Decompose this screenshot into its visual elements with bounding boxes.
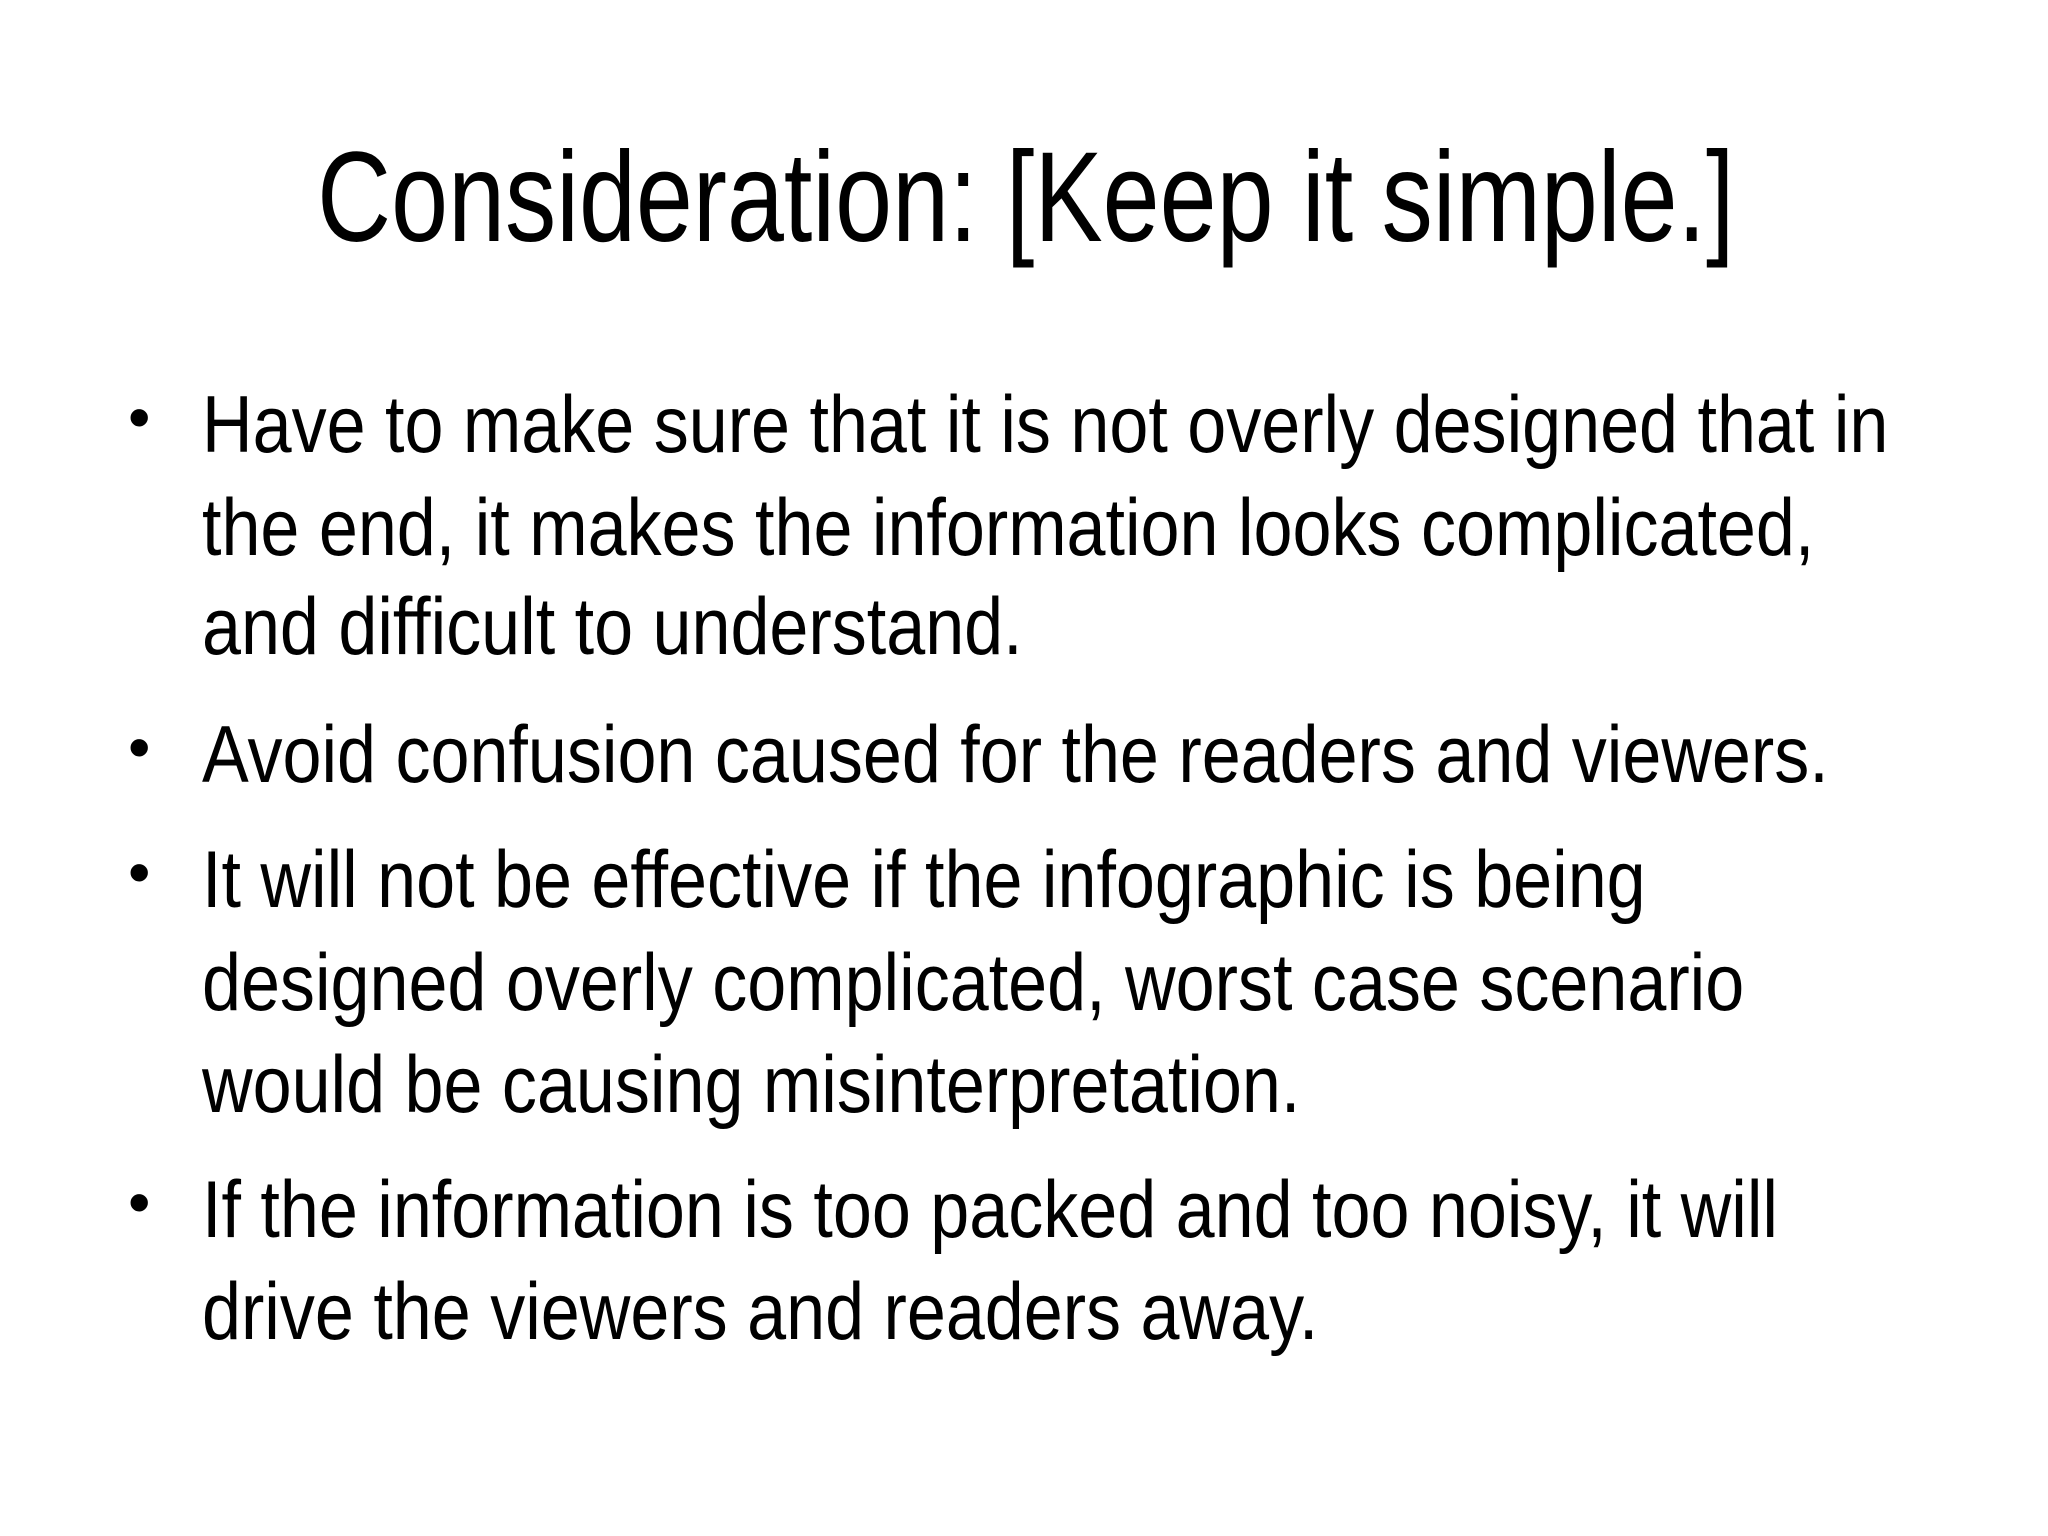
bullet 3: would be causing misinterpretation. bbox=[202, 1040, 1300, 1130]
bullet 4 bbox=[128, 1165, 1778, 1357]
bullet 3: • bbox=[128, 836, 150, 908]
bullet 4: drive the viewers and readers away. bbox=[202, 1267, 1318, 1357]
bullet 1: the end, it makes the information looks complicated, bbox=[202, 483, 1814, 573]
bullet 1: • bbox=[128, 381, 150, 453]
title: Consideration: [Keep it simple.] bbox=[317, 126, 1734, 269]
bullet 1: and difficult to understand. bbox=[202, 582, 1023, 672]
bullet 4: If the information is too packed and too noisy, it will bbox=[202, 1165, 1778, 1255]
bullet 4: • bbox=[128, 1166, 150, 1238]
bullet 1: Have to make sure that it is not overly designed that in bbox=[202, 380, 1888, 470]
bullet list bbox=[128, 380, 1888, 1357]
bullet 3 bbox=[128, 835, 1744, 1130]
bullet 3: It will not be effective if the infographic is being bbox=[202, 835, 1646, 925]
bullet 3: designed overly complicated, worst case scenario bbox=[202, 938, 1744, 1028]
bullet 2: Avoid confusion caused for the readers and viewers. bbox=[202, 710, 1829, 800]
bullet 1 bbox=[128, 380, 1888, 672]
bullet 2: • bbox=[128, 711, 150, 783]
